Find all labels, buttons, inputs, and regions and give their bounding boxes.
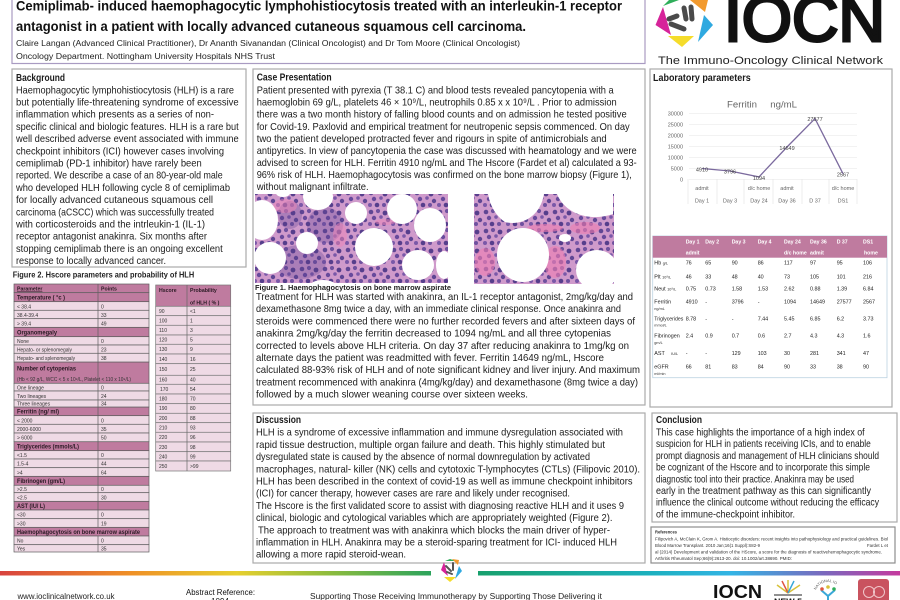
line chart: ferritin: admit: [695, 186, 709, 192]
table: Hscore parameters: No: [17, 538, 24, 544]
table: Hscore parameters: Number of cytopenias: [17, 366, 77, 372]
table: laboratory values: -: [705, 351, 707, 357]
table: Hscore parameters: 34: [101, 402, 107, 408]
table: Hscore parameters: Organomegaly: [17, 330, 58, 336]
table: Hscore probability: 200: [159, 416, 168, 422]
panel: discussion: HLH has been described in the context of covid-19 as well as immune checkpoint inhibitors: [256, 476, 632, 488]
table: laboratory values: 47: [863, 351, 869, 357]
table: laboratory values: Ferritin: [654, 300, 671, 306]
table: Hscore parameters: <1.5: [17, 453, 27, 459]
table: Hscore parameters: 0: [101, 304, 104, 310]
panel: case presentation: for Covid-19. Paxlovid and empirical treatment for neutropenic sepsis commenced. On day: [257, 122, 631, 133]
table: Hscore parameters: Haemophagocytosis on bone marrow aspirate: [17, 530, 141, 536]
table: Hscore probability: 40: [190, 378, 196, 384]
table: Hscore parameters: [14, 284, 149, 552]
panel: conclusion: Conclusion: [656, 415, 702, 426]
table: Hscore parameters: 0: [101, 538, 104, 544]
table: Hscore probability: 9: [190, 347, 193, 353]
table: Hscore parameters: 44: [101, 462, 107, 468]
table: Hscore parameters: 49: [101, 322, 107, 328]
footer logo: red square: [858, 579, 889, 600]
table: laboratory values: 73: [784, 275, 790, 281]
table: Hscore probability: 99: [190, 454, 196, 460]
table: Hscore parameters: 0: [101, 453, 104, 459]
small IOCN emblem: [441, 559, 462, 582]
table: laboratory values: -: [732, 316, 734, 322]
table: laboratory values: 95: [837, 261, 843, 267]
divider bar left: [0, 571, 431, 576]
table: laboratory values: 90: [863, 364, 869, 370]
figure 1 caption: Figure 1. Haemophagocytosis on bone marrow aspirate: [255, 283, 451, 292]
table: Hscore parameters: One lineage: [17, 386, 44, 392]
panel: background: carcinoma (aCSCC) which was successfully treated: [16, 207, 214, 218]
panel: references: Fardet L et: [867, 543, 889, 548]
table: Hscore parameters: 1.5-4: [17, 462, 29, 468]
panel: laboratory parameters: Laboratory parameters: [653, 73, 751, 84]
table: Hscore probability: 190: [159, 406, 168, 412]
table: Hscore probability: 130: [159, 347, 168, 353]
panel: background: reported. We describe a case of an 80-year-old male: [16, 171, 223, 182]
panel: case presentation: haemoglobin 69 g/L, platelets 46 × 10⁹/L, neutrophils 0.85 x x 10⁹/L . Prior to admission: [257, 98, 617, 108]
table: Hscore parameters: 24: [101, 394, 107, 400]
panel: case presentation: dexamethasone 8mg twice a day, with an immediate clinical response. Once anakinra and: [256, 304, 621, 315]
table: Hscore parameters: None: [17, 339, 29, 345]
table: Hscore parameters: 2000-6000: [17, 427, 41, 433]
table: Hscore probability: 210: [159, 426, 168, 432]
table: laboratory values: Neut 10⁹/L: [654, 286, 676, 292]
table: Hscore probability: 98: [190, 445, 196, 451]
panel: background: Background: [16, 73, 65, 84]
table: Hscore parameters: Hepato- and splenomegaly: [17, 356, 75, 362]
table: Hscore probability: 120: [159, 338, 168, 344]
panel: discussion: dysregulated state is caused by the absence of normal downregulation by activated: [256, 452, 590, 463]
line chart: ferritin: 2567: [837, 172, 849, 178]
table: laboratory values: 33: [810, 364, 816, 370]
table: laboratory values: d/c home: [784, 251, 807, 257]
panel: background: who developed HLH following cycle 8 of cemiplimab: [15, 183, 230, 194]
table: laboratory values: -: [686, 351, 688, 357]
table: laboratory values: 90: [732, 261, 738, 267]
line chart: ferritin: 20000: [668, 133, 683, 139]
table: laboratory values: 97: [810, 261, 816, 267]
panel: references: al (2014) Development and validation of the HScore, a score for the diagnosis of reactivehemophagocytic syndrome.: [655, 549, 882, 554]
table: Hscore probability: 1: [190, 318, 193, 324]
table: Hscore parameters: >30: [17, 522, 26, 528]
table: laboratory values: 0.73: [705, 286, 716, 292]
panel: discussion: allowing a more rapid steroid-wean.: [256, 550, 406, 561]
table: laboratory values: 27577: [837, 300, 852, 306]
table: laboratory values: 86: [758, 261, 764, 267]
table: Hscore parameters: <30: [17, 512, 26, 518]
footer logo: National IO: [814, 579, 837, 600]
table: Hscore parameters: 0: [101, 418, 104, 424]
panel: background: response to locally advanced cancer.: [16, 256, 166, 267]
table: Hscore probability: 93: [190, 426, 196, 432]
table: laboratory values: eGFR: [654, 364, 669, 370]
table: Hscore parameters: Hepato- or splenomegaly: [17, 348, 72, 354]
table: Hscore parameters: 23: [101, 348, 107, 354]
line chart: ferritin: D 37: [809, 198, 821, 204]
line chart: ferritin: 15000: [668, 144, 683, 150]
line chart: ferritin: 25000: [668, 122, 683, 128]
panel: case presentation: Case Presentation: [257, 73, 332, 84]
table: Hscore probability: 160: [159, 378, 168, 384]
table: laboratory values: 40: [758, 275, 764, 281]
table: laboratory values: 66: [686, 364, 692, 370]
table: laboratory values: 0.7: [732, 334, 739, 340]
table: Hscore parameters: 30: [101, 496, 107, 502]
table: laboratory values: Day 1: [686, 239, 700, 245]
table: Hscore parameters: 35: [101, 427, 107, 433]
line chart: ferritin: 30000: [668, 111, 683, 117]
panel: background: cemiplimab (PD-1 inhibitor) have rarely been: [16, 158, 202, 170]
table: Hscore probability: 16: [190, 357, 196, 363]
panel: references: [651, 527, 895, 563]
table: laboratory values: 0.9: [705, 334, 713, 340]
panel: background: Haemophagocytic lymphohistiocytosis (HLH) is a rare: [16, 85, 234, 96]
IOCN logo: [656, 0, 885, 67]
table: laboratory values: 2567: [863, 300, 875, 306]
table: laboratory values: 7.44: [758, 316, 768, 322]
table: Hscore parameters: Three lineages: [17, 402, 51, 408]
table: laboratory values: Plt 10⁹/L: [654, 275, 671, 281]
table: laboratory values: admit: [686, 251, 700, 257]
table: laboratory values: 3796: [732, 300, 744, 306]
title block: [12, 0, 645, 64]
panel: background: with corticosteroids and the intrleukin-1 (IL-1): [15, 220, 205, 230]
panel: background: but potentially life-threatening syndrome of excessive: [16, 98, 239, 108]
table: Hscore parameters: 33: [101, 313, 107, 319]
table: Hscore parameters: <2.5: [17, 496, 27, 502]
table: laboratory values: 84: [758, 364, 764, 370]
table: Hscore parameters: Points: [101, 286, 117, 292]
table: laboratory values: home: [864, 251, 878, 257]
panel: discussion: rapid tissue destruction, multiple organ failure and death. This highly stimulated but: [256, 440, 605, 451]
table: Hscore parameters: Triglycerides (mmols/L): [17, 444, 79, 450]
title block: Claire Langan (Advanced Clinical Practitioner), Dr Ananth Sivanandan (Clinical Oncologist) and Dr Tom Moore (Clinical Oncologist): [16, 39, 520, 48]
panel: laboratory parameters: [650, 69, 892, 407]
table: Hscore parameters: 38.4-39.4: [17, 313, 38, 319]
panel: discussion: clinical, biologic and cytological variables which are appropriately weighted (Figure 2).: [256, 513, 612, 524]
table: laboratory values: Triglycerides: [654, 316, 684, 322]
table: laboratory values: 281: [810, 351, 819, 357]
table: Hscore parameters: Two lineages: [17, 394, 47, 400]
table: laboratory values: 33: [705, 275, 711, 281]
table: laboratory values: -: [758, 300, 760, 306]
table: Hscore probability: Hscore: [159, 288, 177, 294]
figure 2 caption: Figure 2. Hscore parameters and probability of HLH: [13, 270, 194, 280]
panel: case presentation: corrected to levels above HLH criteria. On day 37 after reducing anakinra to 1mg/kg on: [256, 341, 629, 352]
table: Hscore parameters: > 6000: [17, 436, 33, 442]
footer: abstract reference: Abstract Reference:: [186, 588, 255, 597]
table: Hscore parameters: 19: [101, 522, 107, 528]
table: Hscore probability: 140: [159, 357, 168, 363]
table: laboratory values: 4.3: [810, 334, 818, 340]
line chart: ferritin: d/c home: [748, 186, 770, 192]
table: Hscore probability: 240: [159, 454, 168, 460]
title block: antagonist in a patient with locally advanced cutaneous squamous cell carcinoma.: [16, 18, 526, 34]
table: Hscore probability: 96: [190, 435, 196, 441]
line chart: ferritin: 27577: [807, 117, 823, 123]
panel: case presentation: two the patient developed protracted fever and rigours in spite of antimicrobials and: [257, 134, 607, 145]
table: laboratory values: Day 3: [732, 239, 746, 245]
table: laboratory values: 2.4: [686, 334, 693, 340]
panel: discussion: HLH is a syndrome of excessive inflammation and immune dysregulation associated with: [256, 428, 623, 439]
panel: case presentation: Treatment for HLH was started with anakinra, an IL-1 receptor antagonist, 2mg/kg/day and: [256, 292, 633, 303]
table: laboratory values: 8.78: [686, 316, 696, 322]
table: Hscore probability: 100: [159, 318, 168, 324]
table: laboratory values: mmol/L: [654, 324, 667, 328]
table: laboratory values: Fibrinogen: [654, 334, 680, 340]
panel: case presentation: [246, 69, 645, 405]
table: laboratory values: admit: [810, 251, 824, 257]
panel: background: well described adverse event associated with immune: [15, 134, 239, 145]
table: laboratory values: 38: [837, 364, 843, 370]
table: laboratory values: 6.84: [863, 286, 874, 292]
table: Hscore probability: 230: [159, 445, 168, 451]
line chart: ferritin: DS1: [838, 198, 848, 204]
line chart: ferritin: 14649: [779, 146, 795, 152]
table: Hscore parameters: < 38.4: [17, 304, 31, 310]
table: laboratory values: 1094: [784, 300, 796, 306]
table: Hscore probability: 70: [190, 396, 196, 402]
table: laboratory values: gm/L: [654, 341, 663, 345]
line chart: ferritin: Day 24: [750, 198, 768, 204]
table: laboratory values: 1.58: [732, 286, 742, 292]
table: Hscore probability: 170: [160, 387, 169, 393]
table: laboratory values: 46: [686, 275, 692, 281]
table: laboratory values: Hb g/L: [654, 261, 668, 267]
panel: references: Filipovich A, McClain K, Grom A. Histiocytic disorders: recent insights into pathophysiology and practical guidelines. Biol: [655, 536, 888, 541]
panel: discussion: The approach to treatment was with anakinra which blocks the main driver of hyper-: [258, 525, 610, 536]
table: laboratory values: D 37: [837, 239, 848, 245]
panel: discussion: The Hscore is the first validated score to assist with diagnosing reactive HLH and it uses 9: [256, 501, 624, 512]
table: laboratory values: 0.75: [686, 286, 696, 292]
table: Hscore parameters: 0: [101, 339, 104, 345]
line chart: ferritin: 10000: [668, 155, 683, 161]
table: Hscore probability: 150: [159, 367, 168, 373]
table: Hscore probability: of HLH ( % ): [190, 300, 220, 306]
table: laboratory values: -: [705, 316, 707, 322]
table: Hscore probability: <1: [190, 309, 196, 315]
table: Hscore parameters: Temperature ( °c ): [17, 296, 65, 302]
table: Hscore parameters: 35: [101, 546, 107, 552]
panel: case presentation: Patient presented with pyrexia (T 38.1 C) and blood tests revealed pancytopenia with a: [257, 85, 614, 96]
table: Hscore probability: 54: [190, 387, 196, 393]
panel: case presentation: there was a two month history of falling blood counts and on admission he tested positive: [257, 110, 627, 121]
panel: conclusion: This case highlights the importance of a high index of: [656, 428, 865, 438]
table: laboratory values: ml/min: [654, 372, 665, 376]
panel: case presentation: followed by a much slower weaning course over sixteen weeks.: [256, 390, 528, 401]
table: laboratory values: 1.53: [758, 286, 768, 292]
table: Hscore probability: 25: [190, 367, 196, 373]
table: Hscore probability: 110: [159, 328, 167, 334]
table: laboratory values: 1.39: [837, 286, 847, 292]
table: laboratory values: -: [705, 300, 707, 306]
panel: case presentation: advised to screen for HLH. Ferritin 4910 ng/mL and The Hscore (Fardet et al) calculated a 93-: [257, 158, 637, 169]
table: laboratory values: Day 2: [705, 239, 719, 245]
panel: background: [12, 69, 246, 267]
panel: case presentation: steroids were commenced there were no further recorded fevers and after sixteen days of: [256, 316, 635, 327]
table: laboratory values: 341: [837, 351, 846, 357]
table: laboratory values: 30: [784, 351, 790, 357]
table: laboratory values: 129: [732, 351, 741, 357]
panel: conclusion: [652, 413, 897, 522]
table: Hscore probability: 220: [159, 435, 168, 441]
panel: discussion: inflammation in HLH. Anakinra may be a steroid-sparing treatment for ICI- induced HLH: [256, 538, 617, 548]
line chart: ferritin: admit: [780, 186, 794, 192]
panel: references: Arthritis Rheumatol Sep;66(9):2613-20. doi: 10.1002/art.38690. PMID:: [655, 556, 792, 561]
table: laboratory values: 103: [758, 351, 767, 357]
table: Hscore parameters: Yes: [17, 546, 26, 552]
table: Hscore parameters: 0: [101, 386, 104, 392]
panel: background: for locally advanced cutaneous squamous cell: [16, 195, 213, 206]
table: Hscore parameters: AST (IU/ L): [17, 504, 45, 510]
table: Hscore parameters: >4: [17, 470, 23, 476]
table: laboratory values: 76: [686, 261, 692, 267]
image: bone marrow micrograph left: [255, 194, 448, 283]
table: laboratory values: 0.88: [810, 286, 820, 292]
table: Hscore probability: 80: [190, 406, 196, 412]
table: Hscore parameters: 0: [101, 487, 104, 493]
line chart: ferritin: 3796: [724, 170, 736, 176]
panel: case presentation: 96% risk of HLH. Haemophagocytosis was confirmed on the bone marrow biopsy (Figure 1),: [257, 170, 632, 181]
table: Hscore parameters: Parameter: [17, 286, 42, 292]
table: laboratory values: 1.6: [863, 334, 870, 340]
table: laboratory values: 5.45: [784, 316, 794, 322]
table: laboratory values: 3.73: [863, 316, 874, 322]
table: Hscore parameters: 50: [101, 436, 107, 442]
panel: discussion: (ICI) for cancer therapy, however cases are rare and likely under recognised.: [256, 489, 570, 500]
table: Hscore probability: 90: [159, 309, 165, 315]
line chart: ferritin: 0: [680, 177, 683, 183]
table: laboratory values: AST IU/L: [654, 351, 678, 357]
table: laboratory values: Day 4: [758, 239, 772, 245]
table: laboratory values: 6.85: [810, 316, 820, 322]
panel: discussion: [253, 413, 645, 563]
title block: Oncology Department. Nottingham University Hospitals NHS Trust: [16, 52, 276, 61]
panel: discussion: macrophages, natural- killer (NK) cells and cytotoxic T-lymphocytes (CTLs) (Filipovic 2010).: [256, 464, 640, 475]
line chart: ferritin: Day 3: [723, 198, 737, 204]
panel: references: References: [655, 530, 678, 534]
panel: conclusion: early in the treatment pathway as this can significantly: [656, 486, 872, 497]
table: laboratory values: 105: [810, 275, 819, 281]
table: Hscore parameters: > 39.4: [17, 322, 31, 328]
footer logo: National IO: NATIONAL IO: [814, 579, 837, 590]
panel: case presentation: without malignant infiltrate.: [256, 182, 369, 193]
line chart: ferritin: Day 1: [695, 198, 709, 204]
table: laboratory values: 4910: [686, 300, 698, 306]
panel: background: inflammation which presents as a series of non-: [16, 110, 214, 121]
footer logo: NEW5: [774, 580, 803, 600]
table: laboratory values: 2.62: [784, 286, 794, 292]
table: laboratory values: 0.6: [758, 334, 765, 340]
panel: conclusion: of the immune-checkpoint inhibitor.: [656, 509, 795, 520]
panel: case presentation: calculated 88-93% risk of HLH and of note significant kidney and liver injury. And maximum: [256, 365, 640, 376]
table: laboratory values: 65: [705, 261, 711, 267]
table: Hscore probability: >99: [190, 464, 199, 470]
table: laboratory values: Day 36: [810, 239, 827, 245]
table: Hscore parameters: (Hb < 92 g/L, WCC < 5 x 10⁹/L, Platelet < 110 x 10⁹/L): [17, 377, 131, 383]
table: laboratory values: [653, 236, 887, 378]
table: Hscore parameters: 0: [101, 512, 104, 518]
panel: case presentation: antipyretics. In view of pancytopenia the case was discussed with heamatology and we were: [257, 146, 637, 157]
panel: background: checkpoint inhibitors (ICI) however cases involving: [16, 146, 224, 157]
table: Hscore probability: Probability: [190, 288, 217, 294]
table: laboratory values: 90: [784, 364, 790, 370]
table: laboratory values: 83: [732, 364, 738, 370]
line chart: ferritin: 5000: [671, 166, 683, 172]
panel: references: Blood Marrow Transplant. 2010 Jan;16(1 Suppl):S82-9: [655, 543, 761, 548]
table: laboratory values: 2.7: [784, 334, 792, 340]
table: laboratory values: 101: [837, 275, 846, 281]
table: laboratory values: ng/mL: [654, 307, 665, 311]
table: Hscore parameters: < 2000: [17, 418, 33, 424]
table: Hscore probability: 88: [190, 416, 196, 422]
table: Hscore parameters: 64: [101, 470, 107, 476]
panel: discussion: Discussion: [256, 415, 301, 426]
table: Hscore parameters: Fibrinogen (gm/L): [17, 479, 65, 485]
table: laboratory values: DS1: [863, 239, 873, 245]
table: Hscore probability: 250: [159, 464, 168, 470]
table: laboratory values: 117: [784, 261, 793, 267]
table: Hscore probability: [156, 285, 231, 471]
table: laboratory values: 14649: [810, 300, 825, 306]
panel: background: stopping cemiplimab there is an ongoing excellent: [16, 244, 223, 255]
table: laboratory values: 81: [705, 364, 711, 370]
panel: background: specific clinical and biologic features. HLH is a rare but: [16, 122, 239, 133]
table: laboratory values: 48: [732, 275, 738, 281]
table: laboratory values: Day 24: [784, 239, 801, 245]
line chart: ferritin: d/c home: [832, 186, 854, 192]
table: Hscore parameters: Ferritin (ng/ ml): [17, 410, 59, 416]
table: Hscore parameters: 38: [101, 356, 107, 362]
panel: case presentation: alternate days the patient was readmitted with fever. Ferritin 14649 ng/mL, Hscore: [256, 353, 604, 364]
table: Hscore probability: 5: [190, 338, 193, 344]
panel: case presentation: anakinra 2mg/kg/day the ferritin decreased to 1094 ng/mL and all three cytopenias: [256, 329, 611, 340]
table: Hscore parameters: >2.5: [17, 487, 27, 493]
line chart: ferritin: Day 36: [778, 198, 796, 204]
divider bar right: [478, 571, 900, 576]
table: laboratory values: 4.3: [837, 334, 844, 340]
panel: background: receptor antagonist anakinra. Six months after: [16, 232, 208, 243]
IOCN logo: The Immuno-Oncology Clinical Network: [658, 55, 884, 67]
table: Hscore probability: 180: [159, 396, 168, 402]
table: laboratory values: 106: [863, 261, 872, 267]
line chart: ferritin: Ferritin ng/mL: [727, 99, 797, 109]
table: laboratory values: 216: [863, 275, 872, 281]
line chart: ferritin: [668, 99, 857, 204]
panel: case presentation: treatment recommenced with anakinra (4mg/kg/day) and dexamethasone (8mg twice a day): [256, 377, 638, 388]
line chart: ferritin: 1094: [753, 176, 765, 182]
table: Hscore probability: 3: [190, 328, 193, 334]
table: laboratory values: 6.2: [837, 316, 844, 322]
image: bone marrow micrograph right: [474, 194, 618, 290]
line chart: ferritin: 4910: [696, 168, 708, 174]
